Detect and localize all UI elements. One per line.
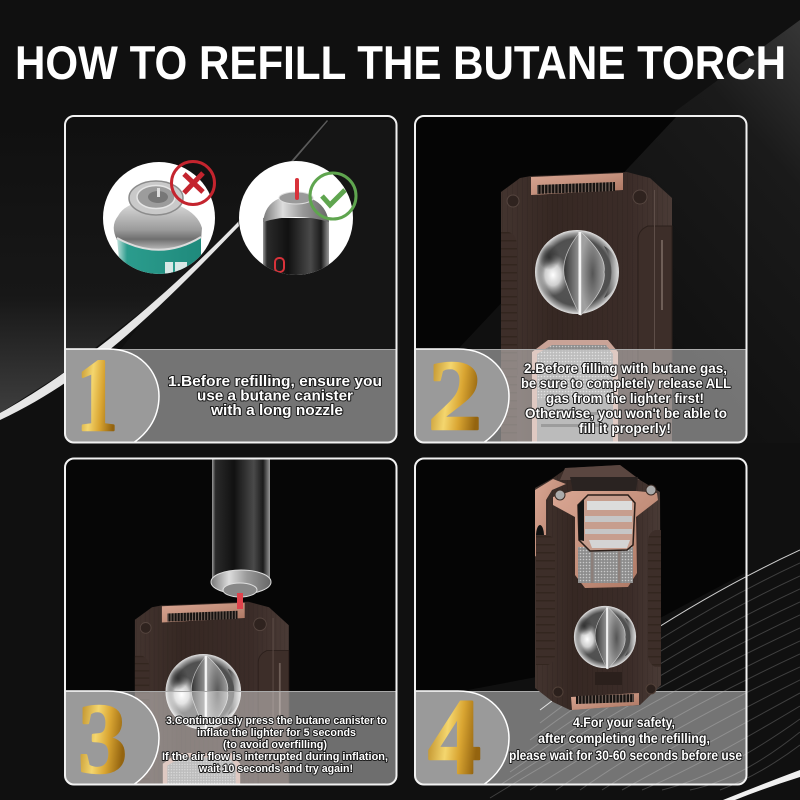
step 4 text: after completing the refilling, xyxy=(538,731,710,746)
lighter device xyxy=(501,172,672,443)
number badge 1 xyxy=(66,348,160,442)
step 2 text: Otherwise, you won't be able to xyxy=(525,406,727,421)
step 2 text: fill it properly! xyxy=(579,421,671,436)
banner: step 2 xyxy=(473,350,746,442)
step 4 text: 4.For your safety, xyxy=(573,715,675,730)
number badge 1: 1 xyxy=(76,338,118,453)
panel: step 4 xyxy=(410,458,747,797)
number badge 2: 2 xyxy=(428,340,482,451)
step 2 text xyxy=(521,361,731,436)
butane canister xyxy=(211,459,271,609)
step 3 text xyxy=(162,715,388,775)
step 4 text xyxy=(509,715,742,763)
panel: step 3 xyxy=(60,458,397,794)
step 1 text: 1.Before refilling, ensure you xyxy=(168,374,382,390)
step 3 text: (to avoid overfilling) xyxy=(223,739,327,751)
banner: step 1 xyxy=(123,350,396,442)
lighter device xyxy=(135,602,289,784)
step 2 text: be sure to completely release ALL xyxy=(521,376,731,391)
banner: step 3 xyxy=(123,692,396,784)
number badge 4: 4 xyxy=(428,678,481,797)
number badge 3 xyxy=(66,690,160,784)
step 1 text xyxy=(168,374,382,419)
number badge 3: 3 xyxy=(78,683,127,794)
panel: step 1 xyxy=(60,116,397,453)
step 1 text: use a butane canister xyxy=(197,389,353,405)
icon: correct long-nozzle canister xyxy=(239,161,356,278)
step 1 text: with a long nozzle xyxy=(210,403,343,419)
number badge 4 xyxy=(416,690,510,784)
step 3 text: If the air flow is interrupted during inflation, xyxy=(162,751,388,763)
step 3 text: inflate the lighter for 5 seconds xyxy=(197,727,356,739)
step 2 text: 2.Before filling with butane gas, xyxy=(524,361,727,376)
step 3 text: wait 10 seconds and try again! xyxy=(198,763,353,775)
assembled lighter xyxy=(535,465,661,710)
banner: step 4 xyxy=(473,692,746,784)
step 2 text: gas from the lighter first! xyxy=(546,391,704,406)
step 3 text: 3.Continuously press the butane canister to xyxy=(166,715,387,727)
step 4 text: please wait for 30-60 seconds before use xyxy=(509,748,742,763)
number badge 2 xyxy=(416,348,510,442)
panel: step 2 xyxy=(410,116,747,451)
icon: wrong short-nozzle canister xyxy=(103,162,215,280)
